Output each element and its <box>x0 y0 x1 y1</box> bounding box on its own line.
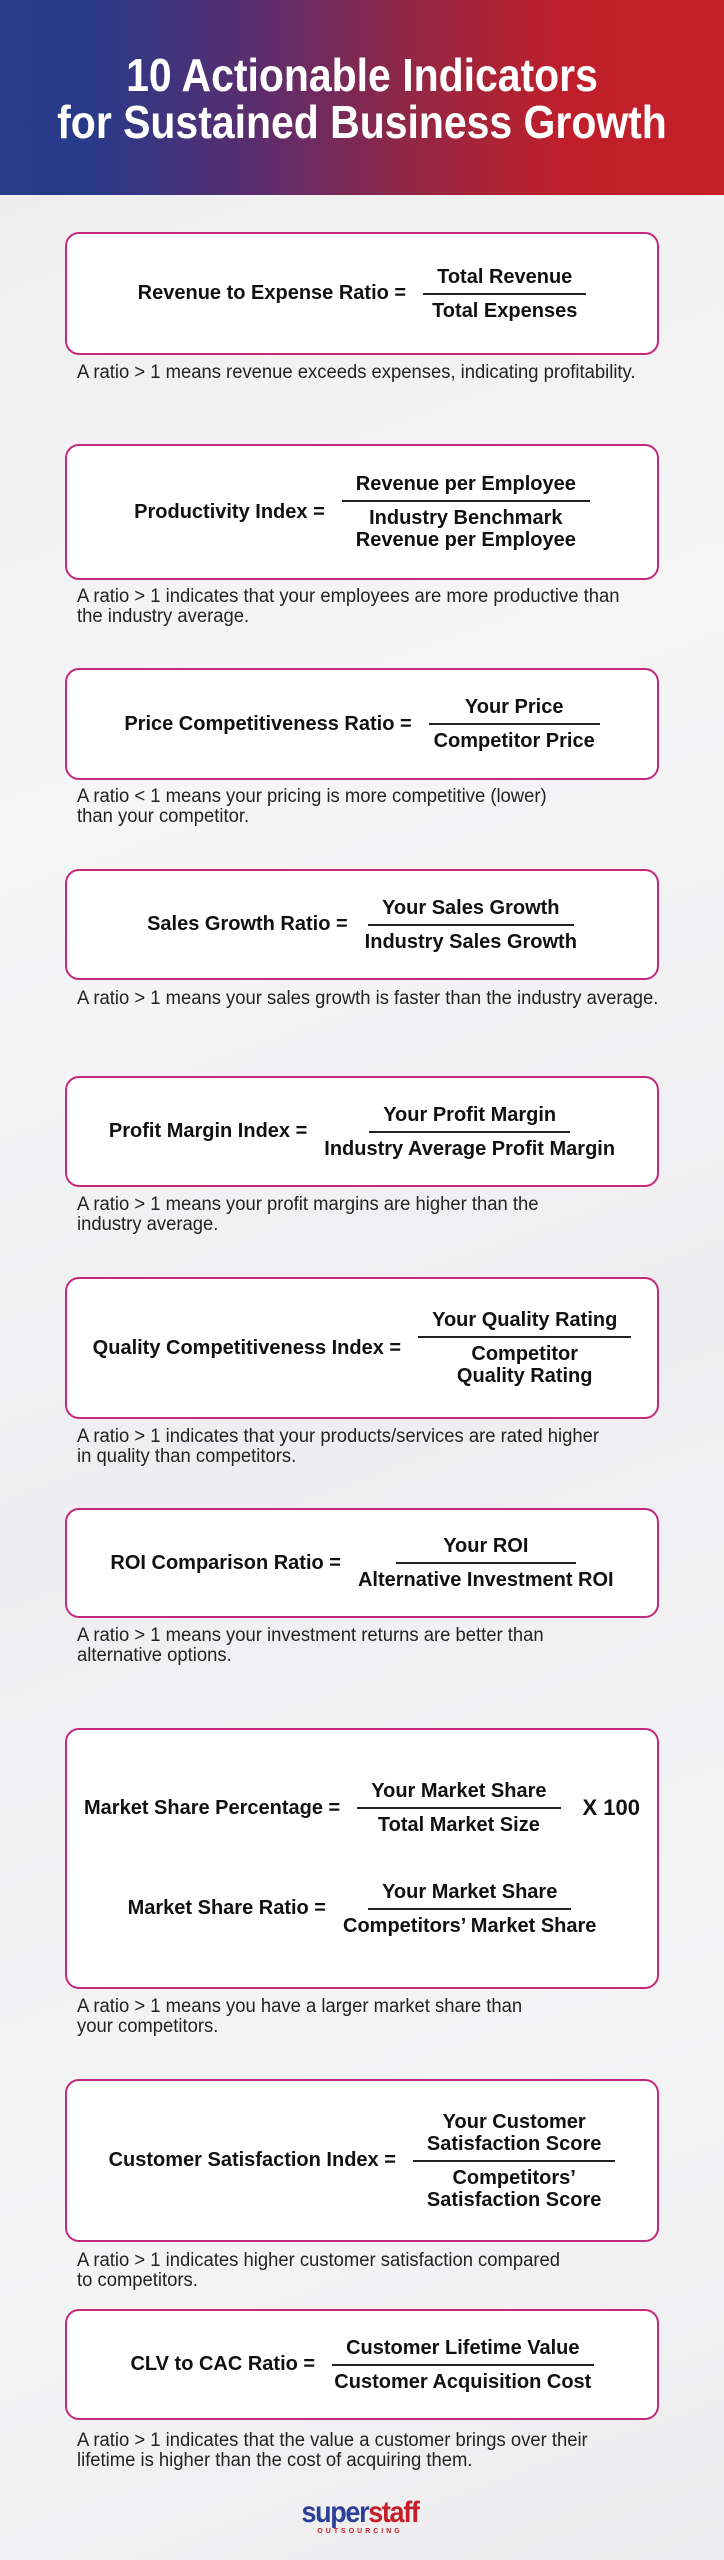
caption 9 <box>77 2250 560 2291</box>
panel: revenue to expense ratio: Total Expenses <box>432 300 577 322</box>
caption 6: A ratio > 1 indicates that your products/services are rated higher <box>77 1426 599 1447</box>
caption 10: lifetime is higher than the cost of acquiring them. <box>77 2450 472 2471</box>
panel: ROI comparison: Your ROI <box>443 1535 528 1557</box>
panel: ROI comparison: Alternative Investment ROI <box>358 1569 614 1591</box>
caption 1: A ratio > 1 means revenue exceeds expenses, indicating profitability. <box>77 362 636 383</box>
caption 5: A ratio > 1 means your profit margins are higher than the <box>77 1194 539 1215</box>
panel: customer satisfaction: Satisfaction Score <box>427 2132 601 2154</box>
caption 2: the industry average. <box>77 606 249 627</box>
formula: market share ratio: Market Share Ratio = <box>128 1897 326 1919</box>
formula: market share percentage: Market Share Percentage = <box>84 1797 340 1819</box>
caption 4: A ratio > 1 means your sales growth is faster than the industry average. <box>77 988 658 1009</box>
title: 10 Actionable Indicators <box>126 49 598 101</box>
caption 5: industry average. <box>77 1214 218 1235</box>
caption 3: than your competitor. <box>77 806 249 827</box>
panel: profit margin: Profit Margin Index = <box>109 1120 307 1142</box>
formula: market share percentage: Total Market Size <box>378 1814 540 1836</box>
formula: market share percentage: Your Market Share <box>371 1780 546 1802</box>
panel: productivity index: Productivity Index = <box>134 500 325 522</box>
panel: ROI comparison <box>65 1508 659 1618</box>
logo: superstaff: superstaff <box>301 2496 419 2529</box>
panel: price competitiveness <box>65 668 659 780</box>
panel: quality competitiveness: Competitor <box>471 1343 578 1365</box>
panel: customer satisfaction: Customer Satisfaction Index = <box>109 2149 396 2171</box>
logo: superstaff: OUTSOURCING <box>317 2528 403 2535</box>
caption 7: A ratio > 1 means your investment returns are better than <box>77 1625 544 1646</box>
panel: productivity index: Revenue per Employee <box>356 529 576 551</box>
formula: market share percentage: X 100 <box>582 1795 640 1820</box>
panel: profit margin: Industry Average Profit Margin <box>324 1138 615 1160</box>
panel: quality competitiveness: Quality Rating <box>457 1365 592 1387</box>
panel: CLV to CAC <box>65 2309 659 2420</box>
panel: price competitiveness: Competitor Price <box>434 730 595 752</box>
panel: sales growth: Your Sales Growth <box>382 896 560 918</box>
caption 8 <box>77 1996 522 2037</box>
caption 2 <box>77 586 619 627</box>
caption 7: alternative options. <box>77 1645 232 1666</box>
panel: customer satisfaction <box>65 2079 659 2242</box>
caption 3 <box>77 786 547 827</box>
panel: market share <box>65 1728 659 1989</box>
caption 8: A ratio > 1 means you have a larger market share than <box>77 1996 522 2017</box>
caption 5 <box>77 1194 539 1235</box>
formula: market share percentage <box>84 1780 640 1836</box>
formula: market share ratio: Competitors’ Market Share <box>343 1915 596 1937</box>
formula: market share ratio <box>128 1881 596 1937</box>
panel: productivity index <box>65 444 659 580</box>
caption 2: A ratio > 1 indicates that your employees are more productive than <box>77 586 619 607</box>
caption 10: A ratio > 1 indicates that the value a customer brings over their <box>77 2430 588 2451</box>
formula: market share ratio: Your Market Share <box>382 1881 557 1903</box>
panel: ROI comparison: ROI Comparison Ratio = <box>110 1552 341 1574</box>
panel: quality competitiveness: Your Quality Rating <box>432 1309 617 1331</box>
panel: CLV to CAC: CLV to CAC Ratio = <box>130 2353 315 2375</box>
panel: productivity index: Industry Benchmark <box>369 507 562 529</box>
panel: revenue to expense ratio: Total Revenue <box>437 266 572 288</box>
title: for Sustained Business Growth <box>57 96 667 148</box>
title <box>57 49 667 148</box>
panel: profit margin: Your Profit Margin <box>383 1104 556 1126</box>
panel: customer satisfaction: Satisfaction Score <box>427 2188 601 2210</box>
caption 6 <box>77 1426 599 1467</box>
panel: productivity index: Revenue per Employee <box>356 473 576 495</box>
panel: price competitiveness: Price Competitiveness Ratio = <box>124 712 412 734</box>
caption 9: A ratio > 1 indicates higher customer satisfaction compared <box>77 2250 560 2271</box>
panel: price competitiveness: Your Price <box>465 696 563 718</box>
panel: sales growth: Industry Sales Growth <box>365 930 577 952</box>
panel: revenue to expense ratio <box>65 232 659 355</box>
panel: profit margin <box>65 1076 659 1187</box>
caption 8: your competitors. <box>77 2016 218 2037</box>
caption 10 <box>77 2430 588 2471</box>
caption 9: to competitors. <box>77 2270 198 2291</box>
caption 3: A ratio < 1 means your pricing is more competitive (lower) <box>77 786 547 807</box>
panel: CLV to CAC: Customer Lifetime Value <box>346 2336 580 2358</box>
panel: revenue to expense ratio: Revenue to Expense Ratio = <box>138 282 406 304</box>
caption 6: in quality than competitors. <box>77 1446 296 1467</box>
panel: sales growth <box>65 869 659 980</box>
panel: sales growth: Sales Growth Ratio = <box>147 913 348 935</box>
header banner <box>0 0 724 195</box>
panel: quality competitiveness: Quality Competitiveness Index = <box>93 1336 401 1358</box>
panel: quality competitiveness <box>65 1277 659 1419</box>
panel: customer satisfaction: Competitors’ <box>452 2166 576 2188</box>
panel: CLV to CAC: Customer Acquisition Cost <box>334 2370 591 2392</box>
caption 7 <box>77 1625 544 1666</box>
panel: customer satisfaction: Your Customer <box>443 2110 586 2132</box>
